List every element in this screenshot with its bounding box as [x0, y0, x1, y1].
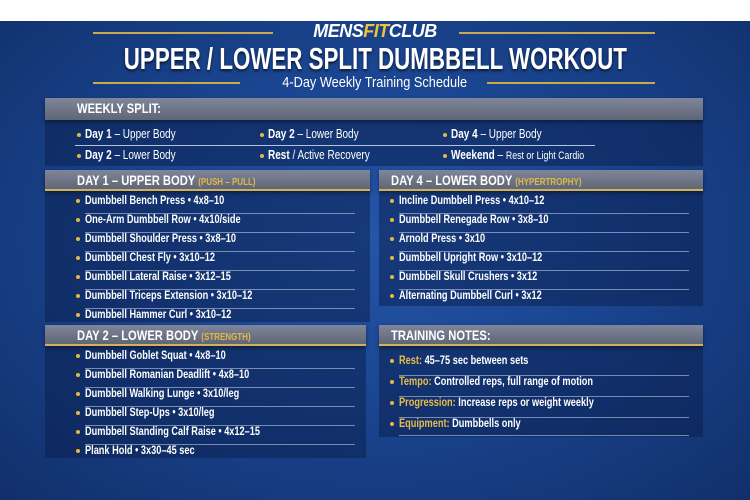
- panel: weekly split: Day 1 – Upper Body: [85, 127, 176, 141]
- panel: weekly split: Day 4 – Upper Body: [451, 127, 542, 141]
- day 4 heading: DAY 4 – LOWER BODY (HYPERTROPHY): [391, 172, 582, 188]
- panel: training notes: Tempo: Controlled reps, full range of motion: [399, 376, 593, 388]
- panel: day 1: Dumbbell Triceps Extension • 3x10–12: [85, 290, 252, 302]
- panel: day 1: Dumbbell Chest Fly • 3x10–12: [85, 252, 215, 264]
- panel: training notes: Rest: 45–75 sec between sets: [399, 355, 528, 367]
- panel: day 1: [43, 170, 372, 322]
- panel: training notes: [376, 324, 705, 437]
- title: UPPER / LOWER SPLIT DUMBBELL WORKOUT: [123, 41, 627, 76]
- panel: day 2: Dumbbell Romanian Deadlift • 4x8–10: [85, 369, 249, 381]
- panel: day 1: Dumbbell Shoulder Press • 3x8–10: [85, 233, 236, 245]
- weekly split heading: [45, 98, 703, 120]
- panel: weekly split: Rest / Active Recovery: [268, 148, 370, 162]
- day 2 heading: [45, 325, 366, 346]
- panel: weekly split: Day 2 – Lower Body: [268, 127, 359, 141]
- panel: day 1: Dumbbell Hammer Curl • 3x10–12: [85, 309, 231, 321]
- day 1 heading: [45, 170, 370, 191]
- panel: day 1: Dumbbell Lateral Raise • 3x12–15: [85, 271, 231, 283]
- day 1 heading: DAY 1 – UPPER BODY (PUSH – PULL): [77, 172, 256, 188]
- panel: day 4: Dumbbell Upright Row • 3x10–12: [399, 252, 542, 264]
- panel: weekly split: Day 2 – Lower Body: [85, 148, 176, 162]
- panel: day 4: [376, 170, 705, 306]
- panel: day 4: Dumbbell Skull Crushers • 3x12: [399, 271, 537, 283]
- panel: weekly split: [43, 98, 705, 166]
- panel: day 4: Dumbbell Renegade Row • 3x8–10: [399, 214, 548, 226]
- day 2 heading: DAY 2 – LOWER BODY (STRENGTH): [77, 327, 251, 343]
- training notes heading: TRAINING NOTES:: [391, 327, 491, 343]
- panel: day 2: [43, 324, 368, 458]
- panel: training notes: Progression: Increase reps or weight weekly: [399, 397, 594, 409]
- brand logo: MENSFITCLUB: [313, 21, 437, 41]
- weekly split heading: WEEKLY SPLIT:: [77, 100, 161, 116]
- panel: day 4: Alternating Dumbbell Curl • 3x12: [399, 290, 542, 302]
- panel: day 4: Arnold Press • 3x10: [399, 233, 485, 245]
- panel: day 2: Dumbbell Walking Lunge • 3x10/leg: [85, 388, 239, 400]
- training notes heading: [379, 325, 703, 346]
- panel: day 2: Dumbbell Step-Ups • 3x10/leg: [85, 407, 214, 419]
- day 4 heading: [379, 170, 703, 191]
- panel: day 4: Incline Dumbbell Press • 4x10–12: [399, 195, 544, 207]
- panel: training notes: Equipment: Dumbbells only: [399, 418, 521, 430]
- panel: day 1: One-Arm Dumbbell Row • 4x10/side: [85, 214, 241, 226]
- panel: weekly split: Weekend – Rest or Light Cardio: [451, 148, 584, 162]
- panel: day 2: Dumbbell Goblet Squat • 4x8–10: [85, 350, 226, 362]
- panel: day 2: Dumbbell Standing Calf Raise • 4x12–15: [85, 426, 260, 438]
- panel: day 1: Dumbbell Bench Press • 4x8–10: [85, 195, 224, 207]
- subtitle: 4-Day Weekly Training Schedule: [283, 74, 467, 91]
- panel: day 2: Plank Hold • 3x30–45 sec: [85, 445, 195, 457]
